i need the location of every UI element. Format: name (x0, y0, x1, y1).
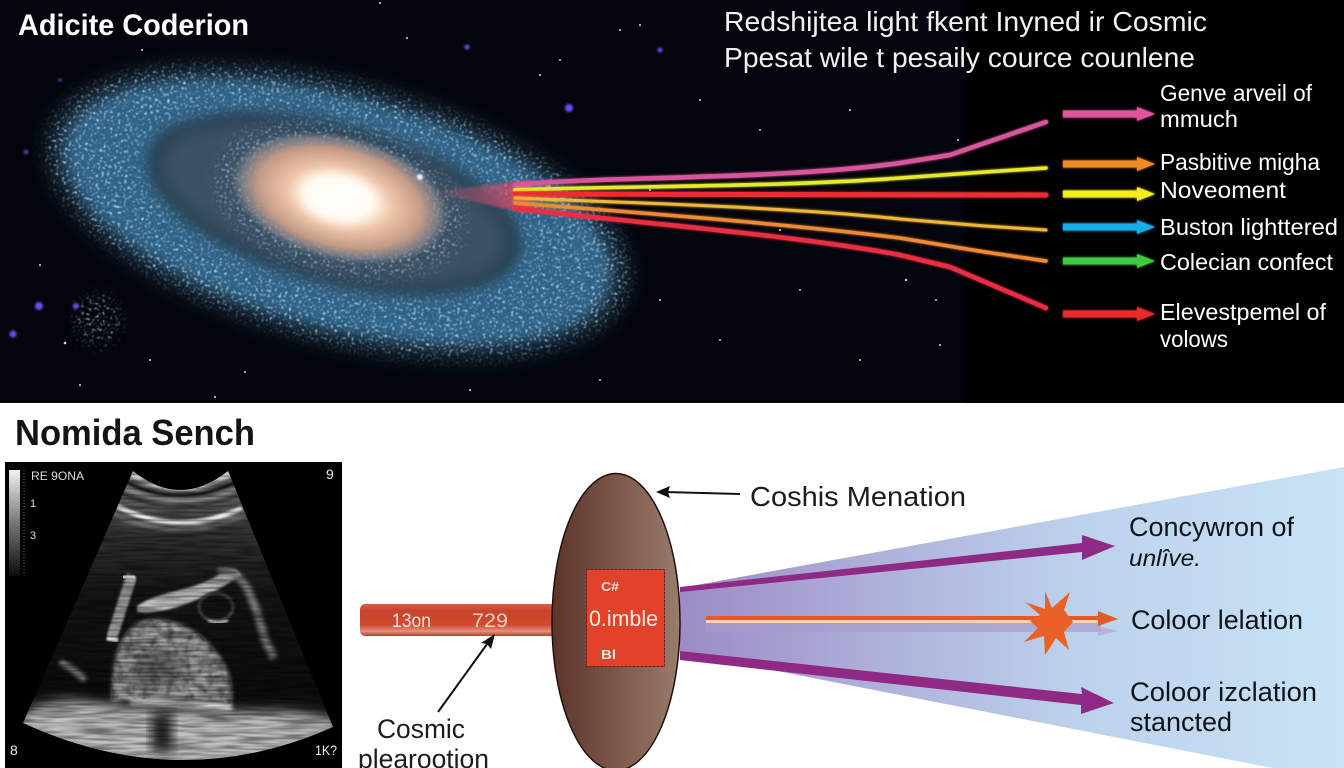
rod (360, 604, 556, 636)
ultrasound annotations (10, 466, 337, 758)
top panel heading: Redshijtea light fkent Inyned ir Cosmic (724, 6, 1207, 37)
red square: Bl (601, 647, 616, 662)
brown lens (552, 474, 680, 768)
upper purple arrow (680, 535, 1115, 592)
ultrasound annotations: 9 (326, 466, 334, 482)
legend labels: Elevestpemel of (1160, 299, 1327, 325)
starburst (1024, 591, 1073, 655)
red square (586, 570, 664, 666)
ultrasound sector (23, 471, 333, 760)
label: lens: Coshis Menation (750, 481, 966, 512)
legend labels: Buston lighttered (1160, 214, 1338, 240)
beam labels (1129, 512, 1317, 737)
top panel heading (724, 6, 1207, 73)
label: rod: Cosmic (377, 714, 465, 744)
legend labels: volows (1160, 326, 1228, 352)
grayscale scale (9, 470, 24, 576)
ultrasound annotations: 3 (30, 530, 36, 542)
light cone (680, 467, 1344, 768)
beam labels: Coloor lelation (1131, 605, 1303, 635)
legend labels: mmuch (1160, 106, 1238, 132)
ultrasound annotations: 1K? (315, 742, 337, 758)
bottom panel title: Nomida Sench (15, 412, 255, 453)
top panel heading: Ppesat wile t pesaily cource counlene (724, 42, 1195, 73)
legend labels: Genve arveil of (1160, 80, 1313, 106)
lower purple arrow (680, 651, 1114, 714)
legend labels: Colecian confect (1160, 249, 1334, 275)
red square: 0.imble (589, 606, 658, 631)
label: rod (358, 714, 489, 768)
background stars (10, 2, 959, 398)
arrow: to lens (656, 486, 740, 498)
ultrasound annotations: 8 (10, 742, 18, 758)
legend labels: Pasbitive migha (1160, 149, 1320, 175)
arrow: to rod (438, 634, 495, 712)
rod: 13on (392, 611, 431, 632)
beam labels: Coloor izclation (1130, 677, 1317, 707)
legend arrows (1063, 107, 1155, 321)
panel: galaxy redshift (0, 0, 1344, 413)
beam labels: Concywron of (1129, 512, 1294, 542)
ultrasound annotations: RE 9ONA (31, 469, 84, 483)
legend labels: Noveoment (1160, 177, 1287, 203)
rod: 729 (472, 611, 508, 632)
ultrasound annotations: 1 (30, 498, 36, 510)
red square: C# (601, 579, 620, 594)
beam labels: stancted (1130, 707, 1232, 737)
panel: optical diagram (358, 467, 1344, 768)
galaxy illustration (35, 53, 640, 371)
central orange ray (706, 611, 1118, 636)
legend labels (1160, 80, 1338, 352)
beam labels: unlîve. (1129, 545, 1201, 571)
top panel title: Adicite Coderion (18, 9, 249, 42)
light rays fan (430, 122, 1046, 308)
panel: ultrasound scan (5, 462, 342, 768)
